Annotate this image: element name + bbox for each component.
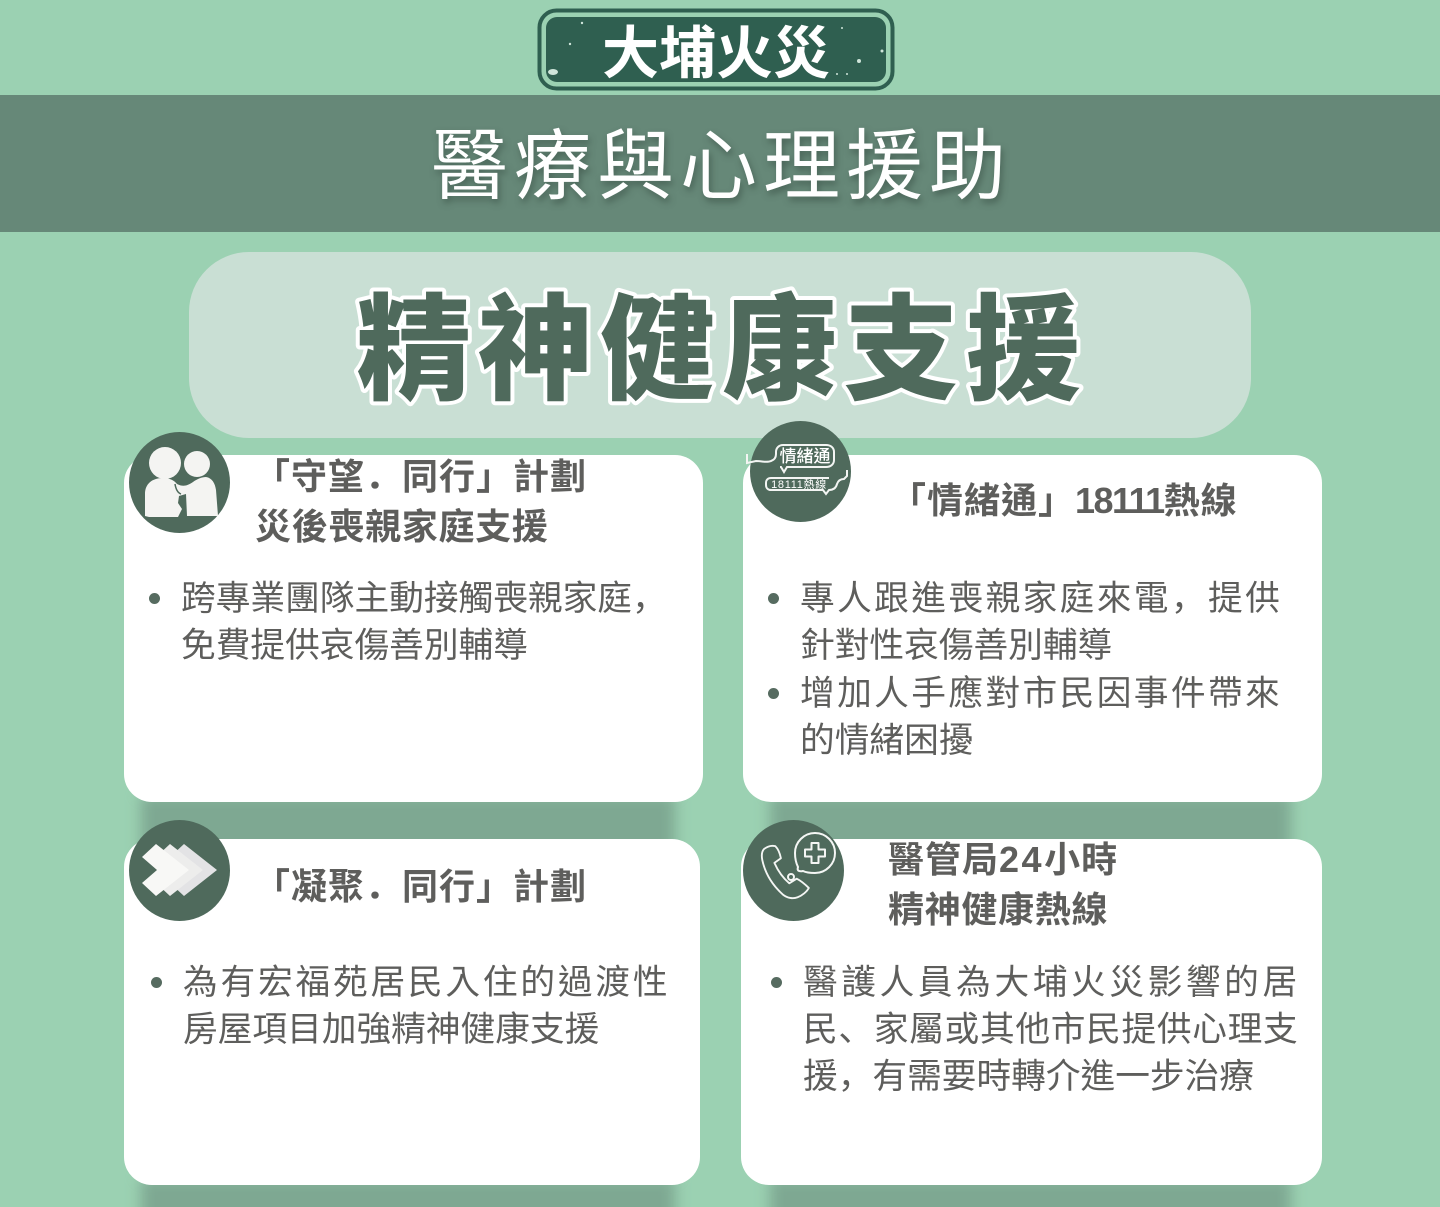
- bullet list: 為有宏福苑居民入住的過渡性: [183, 954, 670, 1004]
- title: 醫療與心理援助: 醫療與心理援助: [431, 105, 1012, 216]
- bullet list: 專人跟進喪親家庭來電，提供: [800, 570, 1282, 620]
- bullet list: 醫護人員為大埔火災影響的居: [803, 954, 1301, 1004]
- icon: 情緒通 hotline: 18111熱線: [771, 477, 827, 491]
- bullet list: 針對性哀傷善別輔導: [800, 617, 1112, 667]
- bullet list: 增加人手應對市民因事件帶來: [800, 665, 1282, 715]
- bullet list: 的情緒困擾: [800, 712, 973, 762]
- heading panel: [189, 252, 1251, 438]
- panel: 凝聚同行 card: [124, 839, 700, 1185]
- bullet list: 民、家屬或其他市民提供心理支: [803, 1001, 1298, 1051]
- icon: converging arrows: [129, 820, 230, 921]
- title banner: [0, 95, 1440, 232]
- bullet list: [771, 954, 1301, 1098]
- bullet list: 房屋項目加強精神健康支援: [183, 1001, 599, 1051]
- heading: 精神健康熱線: 精神健康熱線: [888, 889, 1108, 930]
- bullet list: 免費提供哀傷善別輔導: [181, 617, 528, 667]
- heading: 凝聚同行計劃: 「凝聚．同行」計劃: [254, 858, 587, 910]
- icon: phone with medical cross bubble: [743, 820, 844, 921]
- heading: 災後喪親家庭支援: 災後喪親家庭支援: [255, 506, 549, 547]
- bullet list: [149, 570, 667, 667]
- badge: 大埔火災: [538, 8, 894, 90]
- panel: 醫管局 card: [741, 839, 1322, 1185]
- badge: 大埔火災: 大埔火災: [602, 8, 830, 90]
- icon: two people embracing: [129, 432, 230, 533]
- bullet list: [151, 954, 670, 1051]
- bullet list: 跨專業團隊主動接觸喪親家庭，: [181, 570, 667, 620]
- heading: 情緒通 18111 熱線: 「情緒通」18111熱線: [890, 480, 1238, 521]
- panel: 情緒通 card: [743, 455, 1322, 802]
- heading: 醫管局24小時: 醫管局24小時: [888, 839, 1118, 880]
- heading: 守望同行計劃: 「守望．同行」計劃: [254, 448, 587, 500]
- panel: 守望同行 card: [124, 455, 703, 802]
- bullet list: [768, 570, 1282, 762]
- heading: 精神健康支援: 精神健康支援: [356, 258, 1088, 424]
- bullet list: 援，有需要時轉介進一步治療: [803, 1048, 1254, 1098]
- icon: 情緒通 hotline: [746, 421, 851, 522]
- icon: 情緒通 hotline: 情緒通: [780, 442, 830, 467]
